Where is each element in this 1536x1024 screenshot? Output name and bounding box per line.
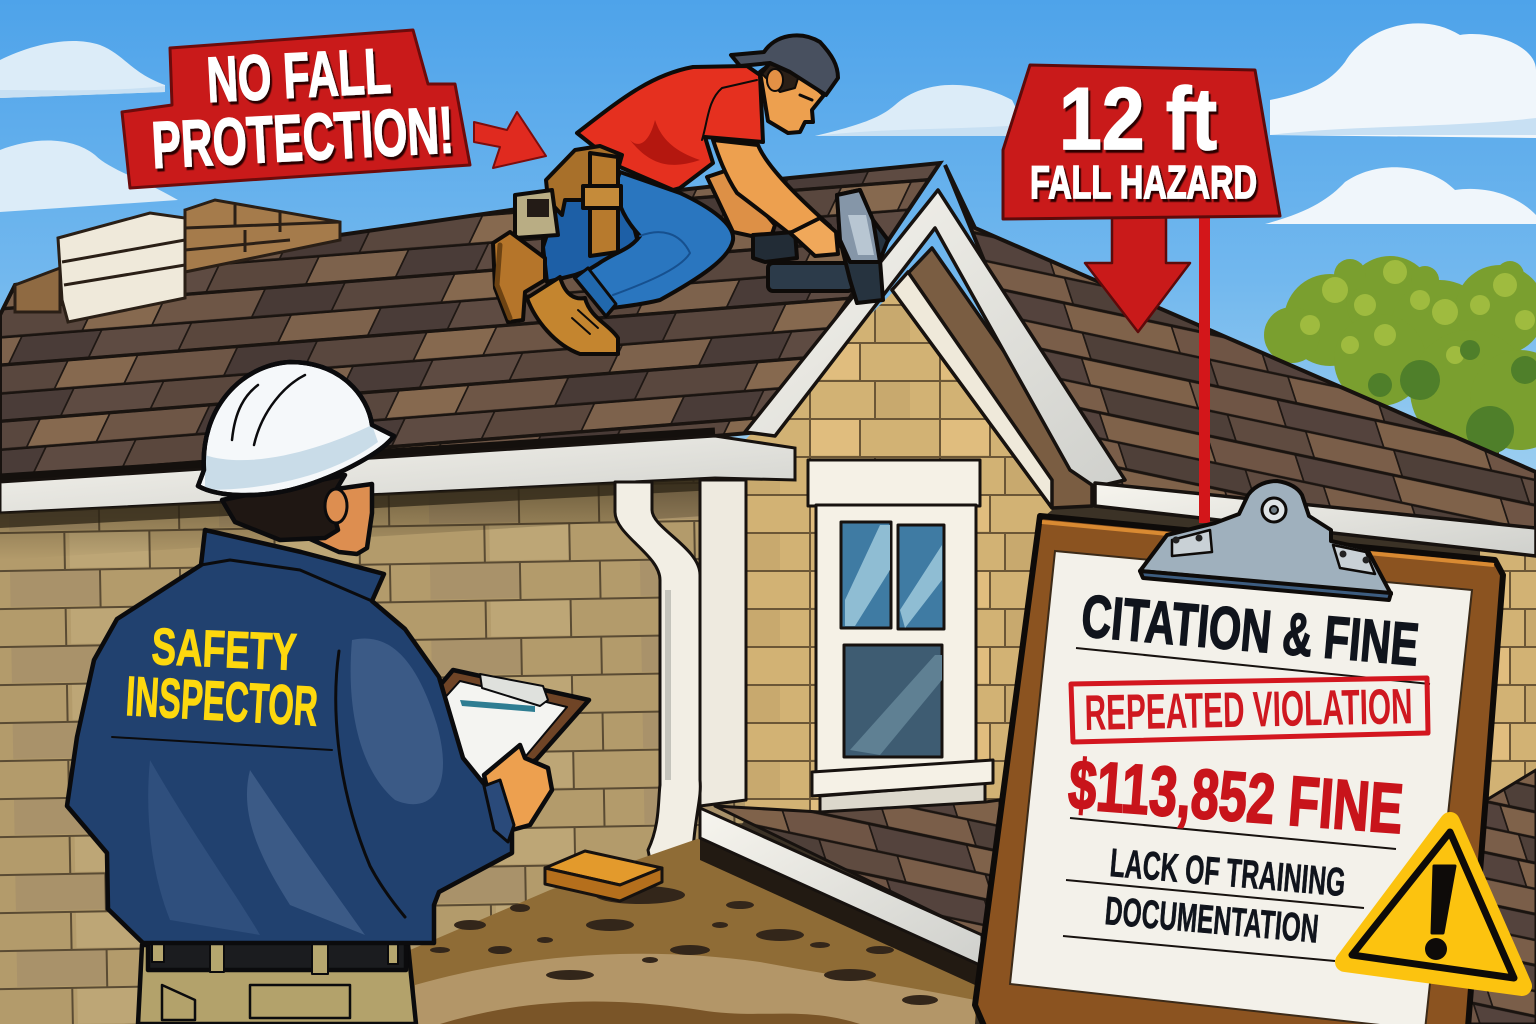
khaki pants <box>138 945 416 1024</box>
tool belt <box>546 146 622 215</box>
callout: no fall protection <box>122 30 546 188</box>
red leader line <box>1199 218 1210 523</box>
sign text <box>150 34 455 182</box>
callout: 12 ft fall hazard <box>1003 65 1280 523</box>
white hard hat <box>198 362 394 495</box>
hair <box>222 475 345 540</box>
inspector <box>67 362 589 1024</box>
belt <box>148 932 406 970</box>
hand <box>484 745 552 830</box>
tree <box>1264 256 1536 480</box>
red sign <box>1003 65 1280 219</box>
face and neck <box>301 484 372 554</box>
near arm <box>713 140 838 253</box>
tool pouch <box>515 190 558 238</box>
navy jacket <box>67 530 512 943</box>
small box on the ground <box>545 851 662 901</box>
jacket text: SAFETY INSPECTOR <box>124 618 320 738</box>
sign text: PROTECTION! <box>150 92 455 182</box>
far arm <box>707 170 775 240</box>
wall backing <box>0 500 1536 1024</box>
cap <box>731 35 838 95</box>
small clipboard <box>436 670 589 780</box>
sky background <box>0 0 1536 560</box>
fine amount: $113,852 FINE <box>1066 745 1406 848</box>
main roof <box>0 163 940 482</box>
lack of training text: DOCUMENTATION <box>1103 889 1320 952</box>
right main roof <box>945 165 1536 530</box>
head <box>760 62 824 133</box>
front boot <box>527 277 618 354</box>
window <box>808 460 993 820</box>
jacket text: SAFETY INSPECTOR: SAFETY <box>150 618 298 682</box>
gable trim <box>745 190 1536 556</box>
jeans rear leg <box>543 175 640 282</box>
lower porch roof <box>700 770 1536 1024</box>
right side wall siding <box>1480 540 1536 810</box>
sign text: 12 ft <box>1059 69 1217 168</box>
jacket cuff <box>484 780 514 842</box>
back boot <box>493 232 545 322</box>
downspout <box>615 480 746 868</box>
lack of training text: LACK OF TRAINING <box>1108 841 1347 905</box>
dark area behind tool belt <box>543 190 590 255</box>
brown board <box>975 516 1503 1024</box>
citation clipboard <box>975 481 1522 1024</box>
jeans thigh and lower leg <box>575 172 733 316</box>
left wall siding <box>0 470 760 1024</box>
clouds <box>0 23 1536 224</box>
roof vent stack <box>15 200 340 322</box>
red sign <box>122 30 470 188</box>
stamp <box>1071 678 1428 742</box>
gable wall <box>745 250 1052 815</box>
sign text: FALL HAZARD <box>1030 156 1257 208</box>
metal clip <box>1140 481 1391 600</box>
sign text: NO FALL <box>205 34 392 116</box>
hand <box>790 218 838 256</box>
worker on roof <box>493 35 888 354</box>
paper <box>1010 551 1472 1024</box>
gutter and fascia <box>0 432 795 528</box>
red shirt <box>577 66 763 190</box>
icon: warning triangle <box>1345 822 1522 986</box>
sign text <box>1030 69 1257 208</box>
rule lines <box>1063 648 1430 961</box>
lack of training text <box>1103 841 1347 952</box>
nail gun <box>753 232 797 262</box>
arrow pointing at worker <box>474 112 546 168</box>
jacket text: SAFETY INSPECTOR: INSPECTOR <box>124 664 320 738</box>
ground dirt <box>410 838 982 1024</box>
down arrow <box>1085 216 1190 332</box>
